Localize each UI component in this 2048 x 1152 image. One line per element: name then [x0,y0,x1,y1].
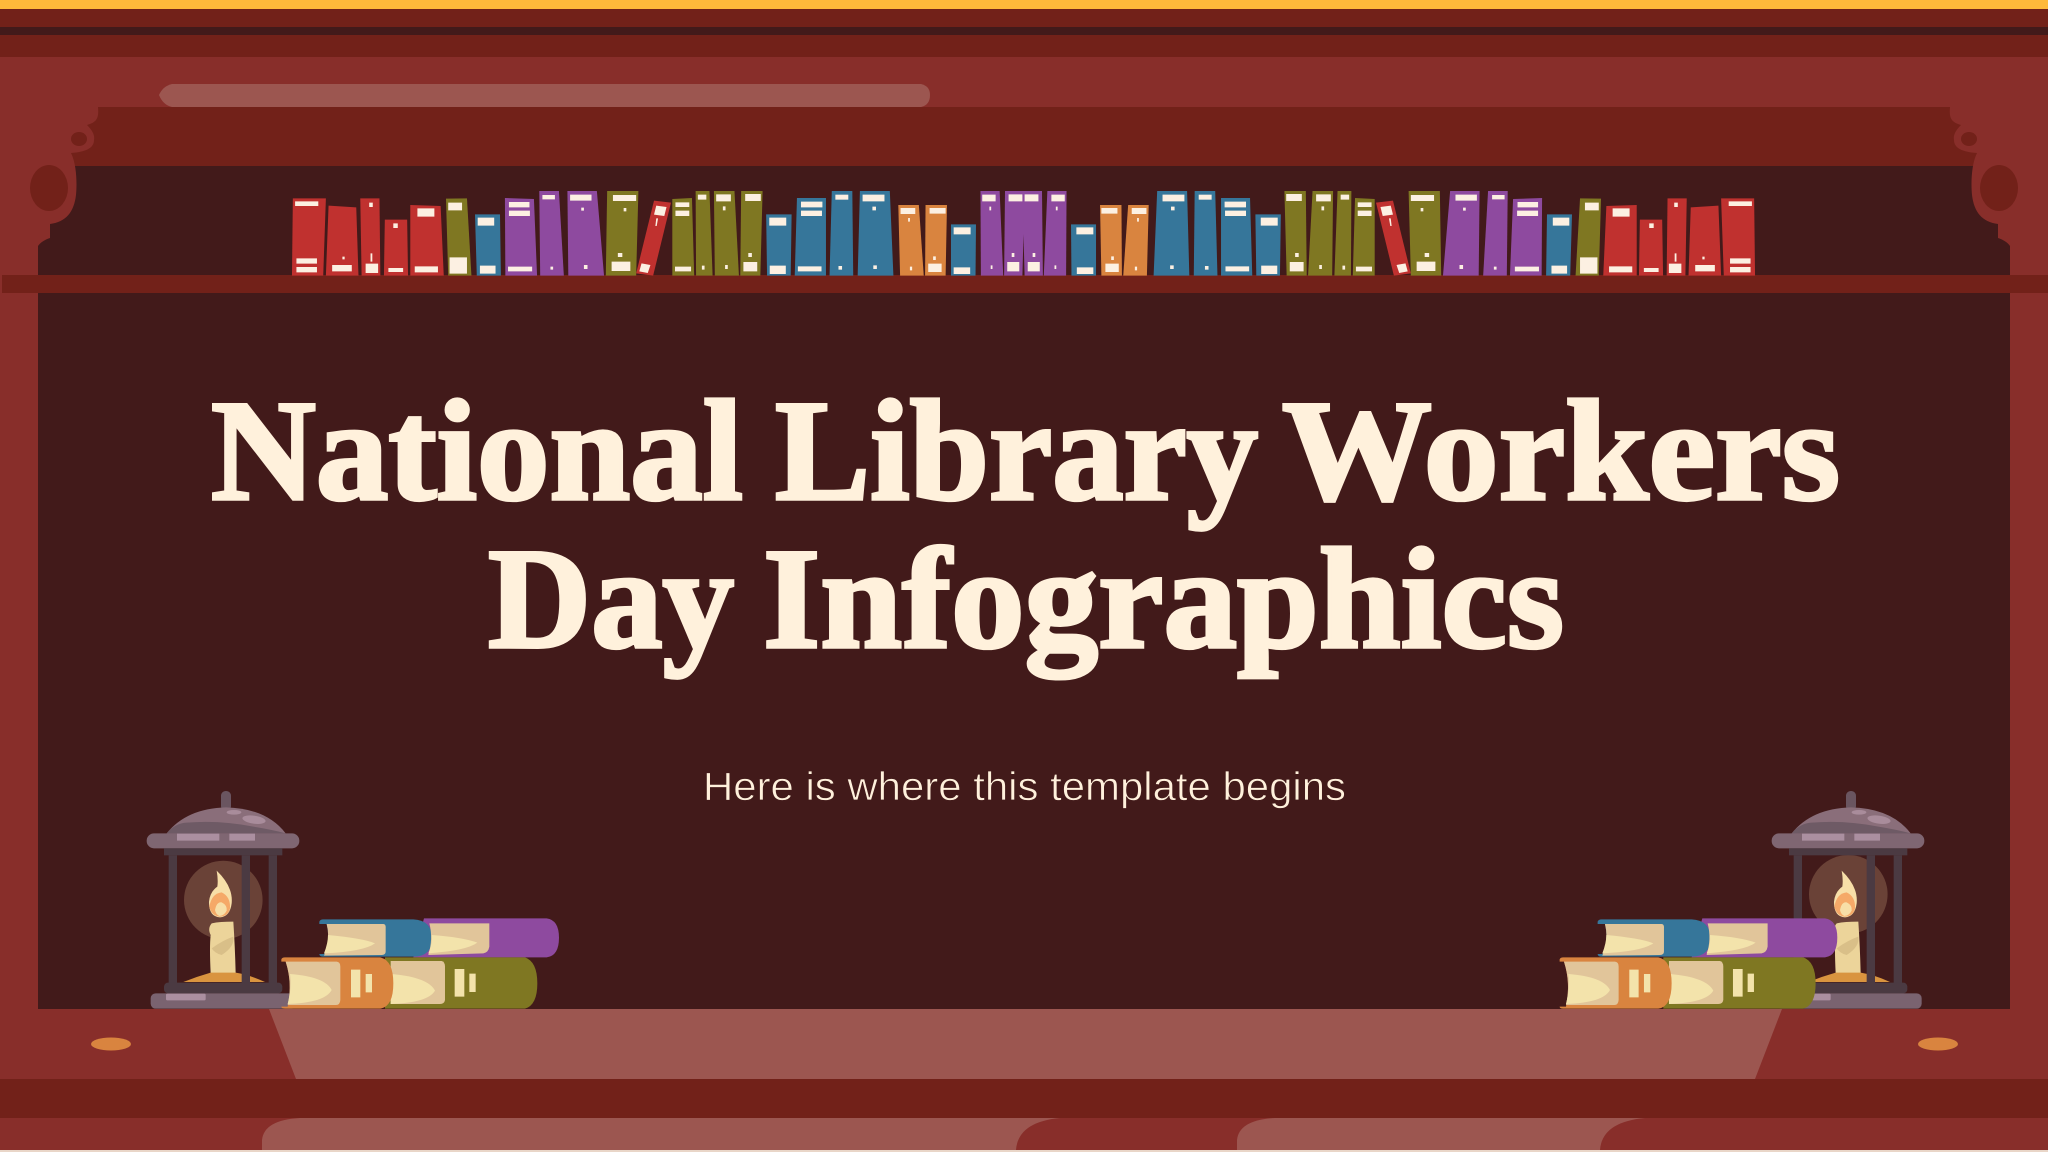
title: Infographics [763,520,1564,679]
title: Workers [1282,372,1840,531]
left pillar with ornament [0,57,98,1009]
title: Library [775,372,1258,531]
title: National [211,372,743,531]
right pillar with ornament [1950,57,2048,1009]
icon: left lantern with candle [147,791,299,1009]
left lantern glow [184,861,263,939]
bottom bands [0,1079,2048,1152]
row of books, left half [292,191,1025,276]
icon: right lantern with candle [1772,791,1924,1009]
title [211,372,1840,679]
icon: right book stack [1560,918,1837,1009]
top cornice bands [0,9,2048,166]
bookshelf plank [2,275,2048,293]
icon: left book stack [281,918,559,1009]
row of books, right half [1022,191,1755,276]
floor ledge [0,1009,2048,1079]
title: Day [488,520,734,679]
right lantern glow [1809,855,1888,934]
subtitle: Here is where this template begins [703,765,1346,809]
cornice highlight bar [159,84,930,107]
top yellow strip [0,0,2048,9]
